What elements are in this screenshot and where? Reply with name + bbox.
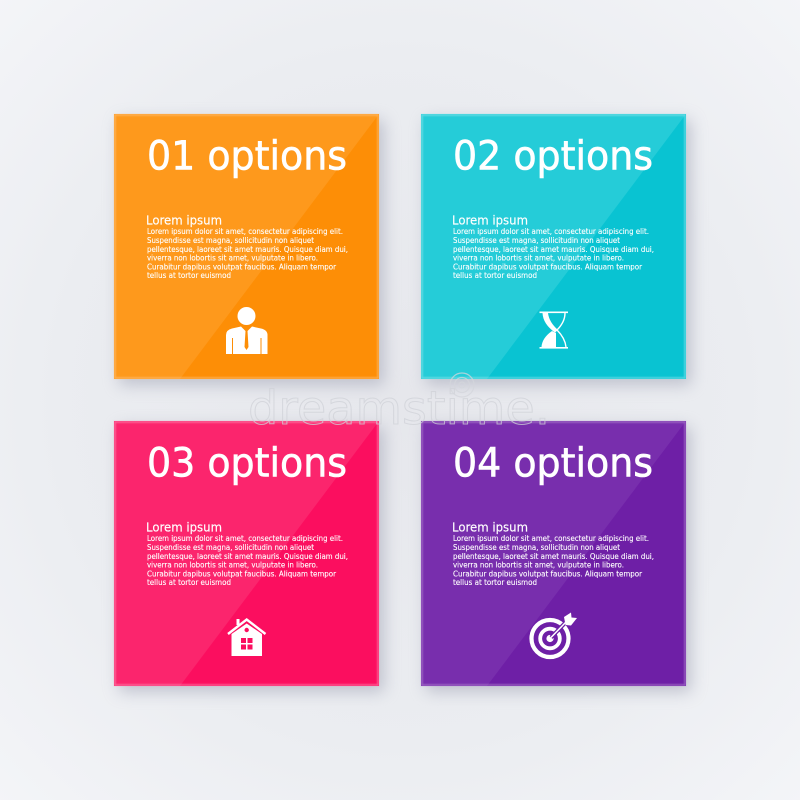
text block: lorem ipsum: Lorem ipsum	[452, 212, 528, 228]
panel: 02 options	[421, 114, 691, 385]
text block: lorem ipsum: pellentesque, laoreet sit amet mauris. Quisque diam dui,	[147, 245, 348, 254]
text block: lorem ipsum: tellus at tortor euismod	[147, 578, 231, 587]
text block: lorem ipsum: Suspendisse est magna, sollicitudin non aliquet	[453, 236, 620, 245]
text block: lorem ipsum: tellus at tortor euismod	[147, 271, 231, 280]
text block: lorem ipsum	[452, 212, 654, 280]
text block: lorem ipsum: Curabitur dapibus volutpat faucibus. Aliquam tempor	[453, 262, 643, 272]
icon: businessman	[226, 307, 268, 354]
watermark: dreamstime.	[248, 381, 550, 435]
text block: lorem ipsum: pellentesque, laoreet sit amet mauris. Quisque diam dui,	[453, 552, 654, 561]
text block: lorem ipsum: pellentesque, laoreet sit amet mauris. Quisque diam dui,	[147, 552, 348, 561]
text block: lorem ipsum: viverra non lobortis sit amet, vulputate in libero.	[453, 254, 624, 262]
panel: 03 options	[114, 421, 384, 692]
text block: lorem ipsum: viverra non lobortis sit amet, vulputate in libero.	[453, 560, 624, 570]
text block: lorem ipsum	[146, 520, 348, 587]
heading: 03 options: 03 options	[147, 440, 347, 486]
icon: house	[228, 619, 266, 656]
text block: lorem ipsum	[146, 212, 348, 280]
text block: lorem ipsum: Lorem ipsum dolor sit amet, consectetur adipiscing elit.	[453, 534, 649, 543]
icon: hourglass	[540, 312, 568, 349]
text block: lorem ipsum: Curabitur dapibus volutpat faucibus. Aliquam tempor	[147, 262, 337, 272]
text block: lorem ipsum: Lorem ipsum	[146, 520, 222, 534]
text block: lorem ipsum: tellus at tortor euismod	[453, 578, 537, 587]
text block: lorem ipsum: Suspendisse est magna, sollicitudin non aliquet	[453, 543, 620, 552]
text block: lorem ipsum: Suspendisse est magna, sollicitudin non aliquet	[147, 543, 314, 552]
heading: 04 options: 04 options	[453, 440, 653, 486]
text block: lorem ipsum: Lorem ipsum dolor sit amet, consectetur adipiscing elit.	[147, 227, 343, 236]
heading: 01 options: 01 options	[147, 134, 347, 180]
panel: 01 options	[114, 114, 384, 385]
text block: lorem ipsum: Lorem ipsum dolor sit amet, consectetur adipiscing elit.	[453, 227, 649, 236]
text block: lorem ipsum: viverra non lobortis sit amet, vulputate in libero.	[147, 560, 318, 570]
heading: 02 options: 02 options	[453, 134, 653, 180]
text block: lorem ipsum: Lorem ipsum dolor sit amet, consectetur adipiscing elit.	[147, 534, 343, 543]
text block: lorem ipsum: Lorem ipsum	[146, 212, 222, 228]
text block: lorem ipsum	[452, 520, 654, 587]
panel: 04 options	[421, 421, 691, 692]
text block: lorem ipsum: pellentesque, laoreet sit amet mauris. Quisque diam dui,	[453, 245, 654, 254]
text block: lorem ipsum: viverra non lobortis sit amet, vulputate in libero.	[147, 254, 318, 262]
text block: lorem ipsum: Lorem ipsum	[452, 520, 528, 534]
text block: lorem ipsum: Suspendisse est magna, sollicitudin non aliquet	[147, 236, 314, 245]
text block: lorem ipsum: tellus at tortor euismod	[453, 271, 537, 280]
icon: target with arrow	[532, 612, 577, 657]
text block: lorem ipsum: Curabitur dapibus volutpat faucibus. Aliquam tempor	[453, 570, 643, 578]
text block: lorem ipsum: Curabitur dapibus volutpat faucibus. Aliquam tempor	[147, 570, 337, 578]
